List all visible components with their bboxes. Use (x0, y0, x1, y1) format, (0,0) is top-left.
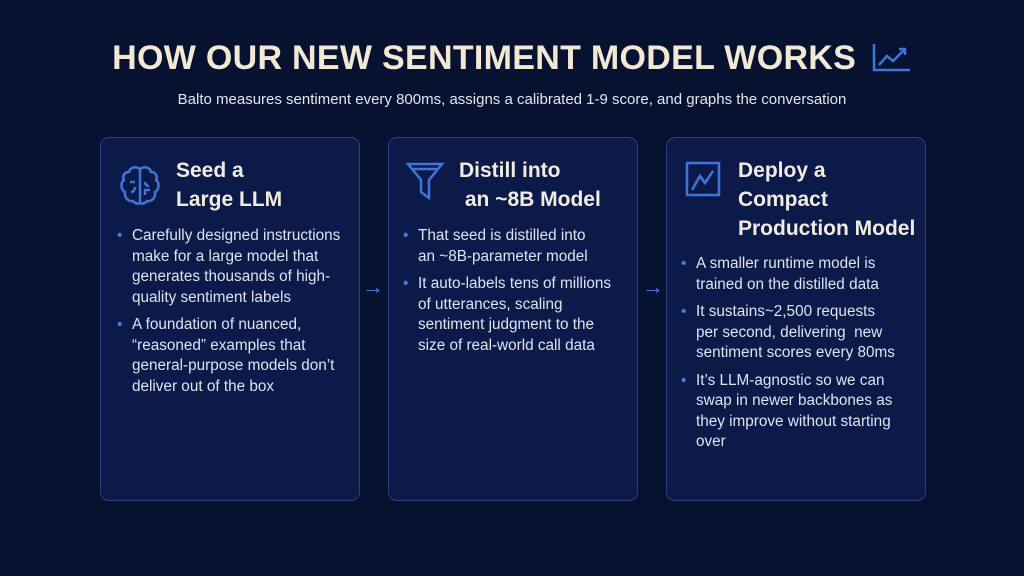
panel: distill (388, 137, 638, 501)
bullets: sentiment scores every 80ms (696, 344, 895, 361)
bullets: swap in newer backbones as (696, 392, 892, 409)
bullets: “reasoned” examples that (132, 336, 305, 354)
bullets: A smaller runtime model is (696, 255, 875, 272)
bullets: an ~8B-parameter model (418, 248, 588, 264)
bullets: they improve without starting (696, 412, 891, 430)
heading: Deploy a (738, 159, 826, 182)
bullets: make for a large model that (132, 248, 318, 264)
heading: Production Model (738, 217, 915, 240)
bullets: per second, delivering new (696, 324, 882, 340)
bullets: It auto-labels tens of millions (418, 275, 611, 292)
bullets: quality sentiment labels (132, 288, 291, 306)
bullets: generates thousands of high- (132, 268, 330, 285)
bullets: A foundation of nuanced, (132, 316, 301, 333)
icon: brain (120, 166, 160, 205)
arrow 1: → (362, 274, 384, 299)
bullets: of utterances, scaling (418, 296, 563, 312)
icon: chart (686, 162, 720, 196)
title: HOW OUR NEW SENTIMENT MODEL WORKS (112, 39, 856, 77)
heading (459, 159, 601, 211)
bullets: general-purpose models don’t (132, 357, 334, 374)
heading: Large LLM (176, 188, 282, 211)
panel: seed (100, 137, 360, 501)
heading: Distill into (459, 159, 560, 182)
arrow 2: → (642, 274, 664, 299)
bullets: over (696, 433, 726, 450)
bullets: It’s LLM-agnostic so we can (696, 372, 884, 388)
icon: funnel (406, 162, 444, 200)
bullets (118, 227, 340, 394)
heading: Seed a (176, 159, 244, 182)
subtitle: Balto measures sentiment every 800ms, assigns a calibrated 1-9 score, and graphs the conversation (178, 91, 846, 108)
bullets: That seed is distilled into (418, 227, 586, 244)
bullets: deliver out of the box (132, 378, 274, 394)
bullets: size of real-world call data (418, 336, 595, 354)
bullets: sentiment judgment to the (418, 316, 594, 333)
heading (738, 159, 915, 240)
bullets: trained on the distilled data (696, 276, 879, 292)
heading: Compact (738, 188, 828, 211)
bullets: Carefully designed instructions (132, 227, 340, 244)
heading (176, 159, 282, 211)
panel: deploy (666, 137, 926, 501)
bullets (404, 227, 611, 354)
heading: an ~8B Model (465, 188, 601, 211)
bullets (682, 255, 895, 450)
bullets: It sustains~2,500 requests (696, 303, 875, 320)
